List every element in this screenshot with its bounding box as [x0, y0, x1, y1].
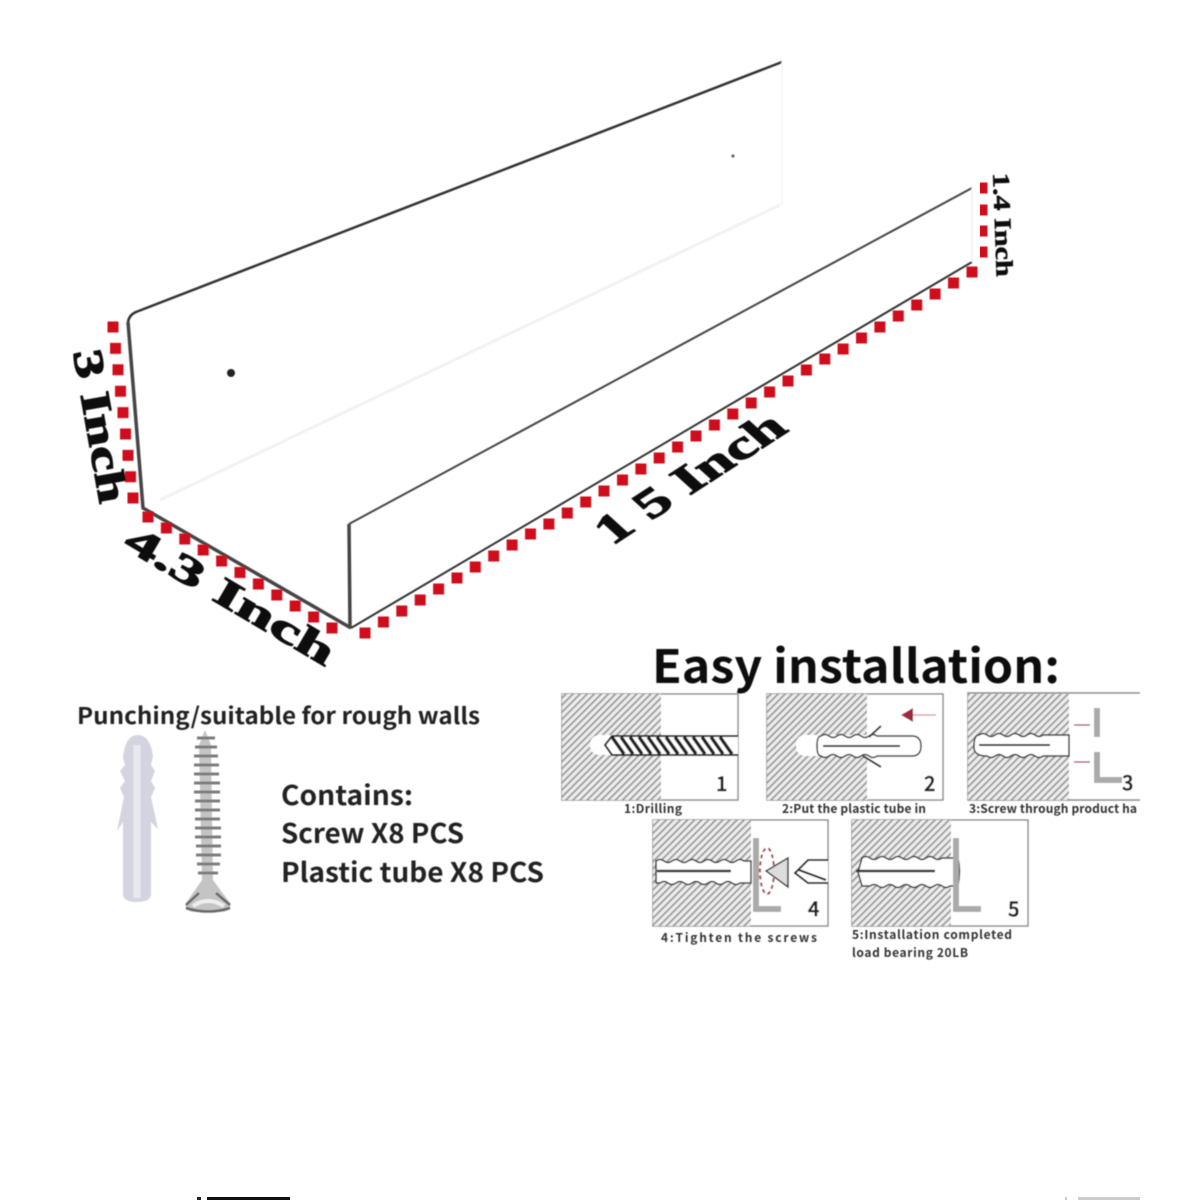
- dimension: 3 inch height: 3 Inch: [63, 346, 135, 506]
- step 3: screw through product hole: 3: [1122, 767, 1133, 796]
- step 5: installation completed: 5: [1008, 893, 1019, 922]
- heading: easy installation: Easy installation:: [652, 631, 1060, 697]
- illustration: clear acrylic shelf: [128, 62, 972, 628]
- step 3: screw through product hole: 3:Screw through product ha: [969, 800, 1137, 817]
- dimension: 15 inch length: 1 5 Inch: [582, 403, 797, 553]
- text block: contents: [281, 774, 544, 890]
- step 5: installation completed: [852, 820, 1028, 961]
- text block: contents: Screw X8 PCS: [281, 812, 464, 851]
- step 5: installation completed: load bearing 20LB: [852, 944, 968, 961]
- step 5: installation completed: 5:Installation completed: [852, 926, 1012, 943]
- icon: countersunk screw: [186, 730, 230, 912]
- dimension: 4.3 inch depth: 4.3 Inch: [117, 516, 344, 675]
- cropped image remnants at bottom edge: [197, 1197, 1140, 1200]
- step 1: drilling: [562, 694, 738, 817]
- step 3: screw through product hole: [968, 693, 1140, 817]
- step 2: put the plastic tube in: 2: [924, 768, 935, 797]
- step 1: drilling: 1: [716, 768, 727, 797]
- dimension: 1.4 inch lip: [982, 172, 1017, 277]
- icon: plastic wall anchor: [117, 735, 158, 902]
- step 1: drilling: 1:Drilling: [624, 800, 682, 817]
- dimension: 1.4 inch lip: 1.4 Inch: [987, 172, 1017, 277]
- dimension: 4.3 inch depth: [117, 516, 344, 675]
- dimension: 15 inch length: [365, 272, 972, 633]
- step 4: tighten the screws: 4:Tighten the screws: [661, 929, 817, 946]
- text block: contents: Plastic tube X8 PCS: [281, 851, 544, 890]
- step 4: tighten the screws: 4: [808, 893, 819, 922]
- step 2: put the plastic tube in: [767, 694, 943, 817]
- step 4: tighten the screws: [653, 820, 828, 946]
- heading: punching note: Punching/suitable for rough walls: [77, 697, 480, 731]
- dimension: 3 inch height: [63, 327, 135, 506]
- step 2: put the plastic tube in: 2:Put the plastic tube in: [782, 800, 926, 817]
- text block: contents: Contains:: [281, 774, 413, 813]
